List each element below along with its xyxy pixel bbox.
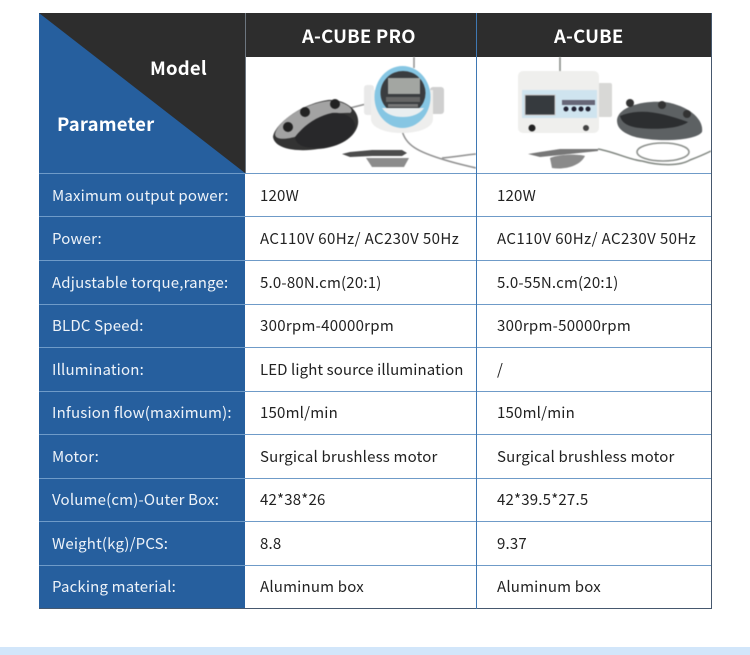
A-CUBE PRO values: 8.8 <box>260 533 281 554</box>
row labels: Maximum output power: <box>52 185 229 206</box>
heading: Model: Model <box>150 55 207 81</box>
pedal base <box>273 100 358 150</box>
row labels: Motor: <box>52 446 99 467</box>
A-CUBE values: 9.37 <box>497 533 527 554</box>
A-CUBE PRO values: 120W <box>260 185 299 206</box>
A-CUBE values: 300rpm-50000rpm <box>497 315 631 336</box>
row labels: Packing material: <box>52 576 176 597</box>
row labels: Power: <box>52 228 102 249</box>
A-CUBE PRO values <box>260 185 464 597</box>
column header: A-CUBE PRO: A-CUBE PRO <box>302 23 416 49</box>
console blue ring <box>374 66 430 128</box>
A-CUBE values: 150ml/min <box>497 402 575 423</box>
handpiece holder <box>550 155 585 168</box>
A-CUBE PRO values: 42*38*26 <box>260 489 326 510</box>
product photo: A-CUBE <box>518 56 711 170</box>
pedal <box>617 102 702 140</box>
row labels: Volume(cm)-Outer Box: <box>52 489 219 510</box>
handpiece <box>528 149 598 157</box>
A-CUBE PRO values: LED light source illumination <box>260 359 464 380</box>
row labels: Adjustable torque,range: <box>52 272 228 293</box>
console body <box>518 71 599 133</box>
A-CUBE values: Aluminum box <box>497 576 601 597</box>
product photo: A-CUBE PRO <box>272 56 476 170</box>
console bracket <box>596 83 612 117</box>
row labels: BLDC Speed: <box>52 315 144 336</box>
A-CUBE values: AC110V 60Hz/ AC230V 50Hz <box>497 228 696 249</box>
row labels: Illumination: <box>52 359 144 380</box>
console body <box>371 90 433 133</box>
console side bracket <box>430 87 444 114</box>
table background: parameter column <box>39 173 245 609</box>
row labels: Weight(kg)/PCS: <box>52 533 168 554</box>
A-CUBE PRO values: Surgical brushless motor <box>260 446 437 467</box>
A-CUBE PRO values: 5.0-80N.cm(20:1) <box>260 272 382 293</box>
column header: A-CUBE: A-CUBE <box>554 23 624 49</box>
diagonal header cell <box>39 13 245 173</box>
handpiece <box>342 150 407 157</box>
heading: Parameter: Parameter <box>57 111 154 137</box>
A-CUBE values: 5.0-55N.cm(20:1) <box>497 272 619 293</box>
A-CUBE PRO values: Aluminum box <box>260 576 364 597</box>
A-CUBE PRO values: 150ml/min <box>260 402 338 423</box>
pedal dark plate <box>295 113 355 148</box>
A-CUBE values: / <box>497 359 503 380</box>
A-CUBE values: Surgical brushless motor <box>497 446 674 467</box>
console face <box>380 71 426 115</box>
row labels: Infusion flow(maximum): <box>52 402 232 423</box>
A-CUBE values: 42*39.5*27.5 <box>497 489 588 510</box>
row labels <box>52 185 232 597</box>
bottom light blue band <box>0 647 750 655</box>
pedal silver top <box>275 101 352 139</box>
A-CUBE PRO values: AC110V 60Hz/ AC230V 50Hz <box>260 228 459 249</box>
A-CUBE values: 120W <box>497 185 536 206</box>
handpiece holder <box>366 158 409 167</box>
A-CUBE values <box>497 185 696 597</box>
stand and cable <box>560 57 711 165</box>
stand and cables <box>350 57 476 168</box>
A-CUBE PRO values: 300rpm-40000rpm <box>260 315 394 336</box>
header bar: models <box>246 13 712 57</box>
